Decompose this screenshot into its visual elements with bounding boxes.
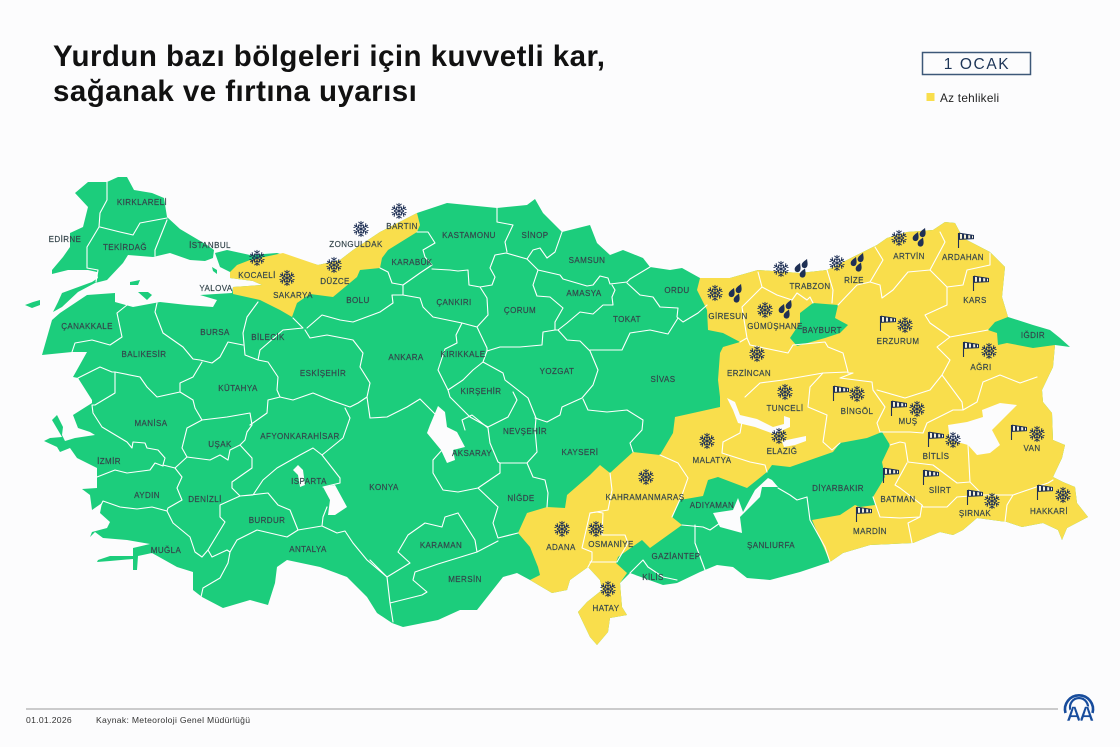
province labels: BARTIN [386, 222, 418, 231]
snow warning icons [249, 203, 1071, 597]
province labels: ŞIRNAK [959, 509, 991, 518]
yellow warned provinces: east and south [518, 222, 1088, 645]
province labels: ERZİNCAN [727, 369, 771, 378]
province labels: KARAMAN [420, 541, 462, 550]
province labels: SİVAS [651, 375, 675, 384]
province labels: AMASYA [566, 289, 602, 298]
province labels: BİLECİK [251, 333, 285, 342]
province labels: MUĞLA [151, 546, 181, 555]
province labels: KÜTAHYA [218, 384, 258, 393]
province labels: KAYSERİ [562, 448, 598, 457]
province labels: HAKKARİ [1030, 507, 1068, 516]
province labels: SAMSUN [569, 256, 605, 265]
province labels: AYDIN [134, 491, 160, 500]
Beyşehir Lake [323, 485, 347, 515]
date box: 1 OCAK [944, 56, 1010, 73]
rain warning icons [728, 227, 928, 319]
province labels: AĞRI [970, 363, 992, 372]
province labels: ORDU [664, 286, 690, 295]
province labels: ERZURUM [877, 337, 919, 346]
Hazar Lake [782, 436, 806, 447]
province labels: KİLİS [642, 573, 664, 582]
title: sağanak ve fırtına uyarısı [53, 75, 417, 108]
province labels: ARTVİN [893, 252, 925, 261]
province labels: TUNCELİ [766, 404, 804, 413]
province labels: KONYA [369, 483, 399, 492]
province borders [72, 182, 1053, 622]
Eğirdir Lake [293, 465, 305, 487]
province labels: ÇANKIRI [436, 298, 472, 307]
footer date and source: 01.01.2026 [26, 715, 72, 725]
province labels: ÇORUM [504, 306, 536, 315]
Tuz Lake [427, 406, 465, 463]
date box [922, 52, 1030, 74]
province labels: TOKAT [613, 315, 641, 324]
lakes and water [293, 398, 1017, 533]
legend: az tehlikeli: Az tehlikeli [940, 91, 999, 105]
province labels: ZONGULDAK [329, 240, 383, 249]
province labels: BOLU [346, 296, 370, 305]
province labels: TRABZON [789, 282, 831, 291]
province labels: MUŞ [899, 417, 917, 426]
province labels: BALIKESİR [122, 350, 166, 359]
province labels: BAYBURT [802, 326, 842, 335]
province labels: NEVŞEHİR [503, 427, 547, 436]
province labels: ISPARTA [291, 477, 327, 486]
province labels: KARS [963, 296, 987, 305]
Lake Van [948, 403, 1017, 455]
province labels: TEKİRDAĞ [103, 243, 147, 252]
province labels: DİYARBAKIR [812, 484, 864, 493]
province labels: DENİZLİ [188, 495, 222, 504]
province labels: KIRŞEHİR [460, 387, 502, 396]
province labels: AFYONKARAHİSAR [260, 432, 340, 441]
province labels: MERSİN [448, 575, 482, 584]
footer date and source: Kaynak: Meteoroloji Genel Müdürlüğü [96, 715, 250, 725]
province labels: GÜMÜŞHANE [747, 322, 803, 331]
province labels: ÇANAKKALE [61, 322, 113, 331]
province labels: KOCAELİ [238, 271, 276, 280]
province labels: ANKARA [388, 353, 424, 362]
province labels: KARABÜK [391, 258, 433, 267]
province labels: KASTAMONU [442, 231, 496, 240]
province labels: SİİRT [929, 486, 951, 495]
province labels [49, 198, 1068, 613]
province labels: ELAZIĞ [767, 447, 797, 456]
province labels: ARDAHAN [942, 253, 984, 262]
province labels: BİNGÖL [841, 407, 873, 416]
province labels: ADANA [546, 543, 576, 552]
province labels: GAZİANTEP [652, 552, 700, 561]
province labels: KIRKLARELİ [117, 198, 167, 207]
province labels: SAKARYA [273, 291, 313, 300]
province labels: ANTALYA [289, 545, 327, 554]
province labels: NİĞDE [507, 494, 535, 503]
province labels: ŞANLIURFA [747, 541, 795, 550]
province labels: BURSA [200, 328, 230, 337]
footer rule [26, 708, 1058, 710]
province labels: MANİSA [134, 419, 168, 428]
AA logo [1065, 695, 1094, 726]
wind warning icons [834, 233, 1052, 522]
yellow warned provinces: west Black Sea [230, 213, 420, 317]
province labels: BATMAN [880, 495, 916, 504]
province labels: İSTANBUL [189, 241, 231, 250]
province labels: GİRESUN [708, 312, 748, 321]
province labels: MARDİN [853, 527, 887, 536]
province labels: MALATYA [693, 456, 732, 465]
green land base [25, 177, 1088, 645]
map of Turkey [25, 177, 1088, 645]
province labels: KIRIKKALE [441, 350, 485, 359]
province labels: KAHRAMANMARAŞ [606, 493, 684, 502]
province labels: OSMANİYE [588, 540, 634, 549]
province labels: BİTLİS [923, 452, 949, 461]
AA logo: AA [1066, 703, 1094, 726]
province labels: EDİRNE [49, 235, 81, 244]
footer date and source [26, 715, 250, 725]
province labels: ADIYAMAN [690, 501, 734, 510]
province labels: BURDUR [249, 516, 285, 525]
title [53, 40, 605, 108]
title: Yurdun bazı bölgeleri için kuvvetli kar, [53, 40, 605, 73]
province labels: ESKİŞEHİR [300, 369, 346, 378]
Atatürk Dam [713, 478, 778, 533]
province labels: SİNOP [522, 231, 548, 240]
province labels: YOZGAT [540, 367, 574, 376]
province labels: HATAY [593, 604, 620, 613]
province labels: IĞDIR [1021, 331, 1045, 340]
province labels: VAN [1023, 444, 1041, 453]
province labels: İZMİR [97, 457, 121, 466]
province labels: DÜZCE [320, 277, 350, 286]
Keban Dam [727, 398, 790, 434]
province labels: AKSARAY [452, 449, 492, 458]
province labels: RİZE [844, 276, 864, 285]
province labels: YALOVA [199, 284, 233, 293]
province labels: UŞAK [208, 440, 232, 449]
Bayburt green province [790, 303, 848, 346]
